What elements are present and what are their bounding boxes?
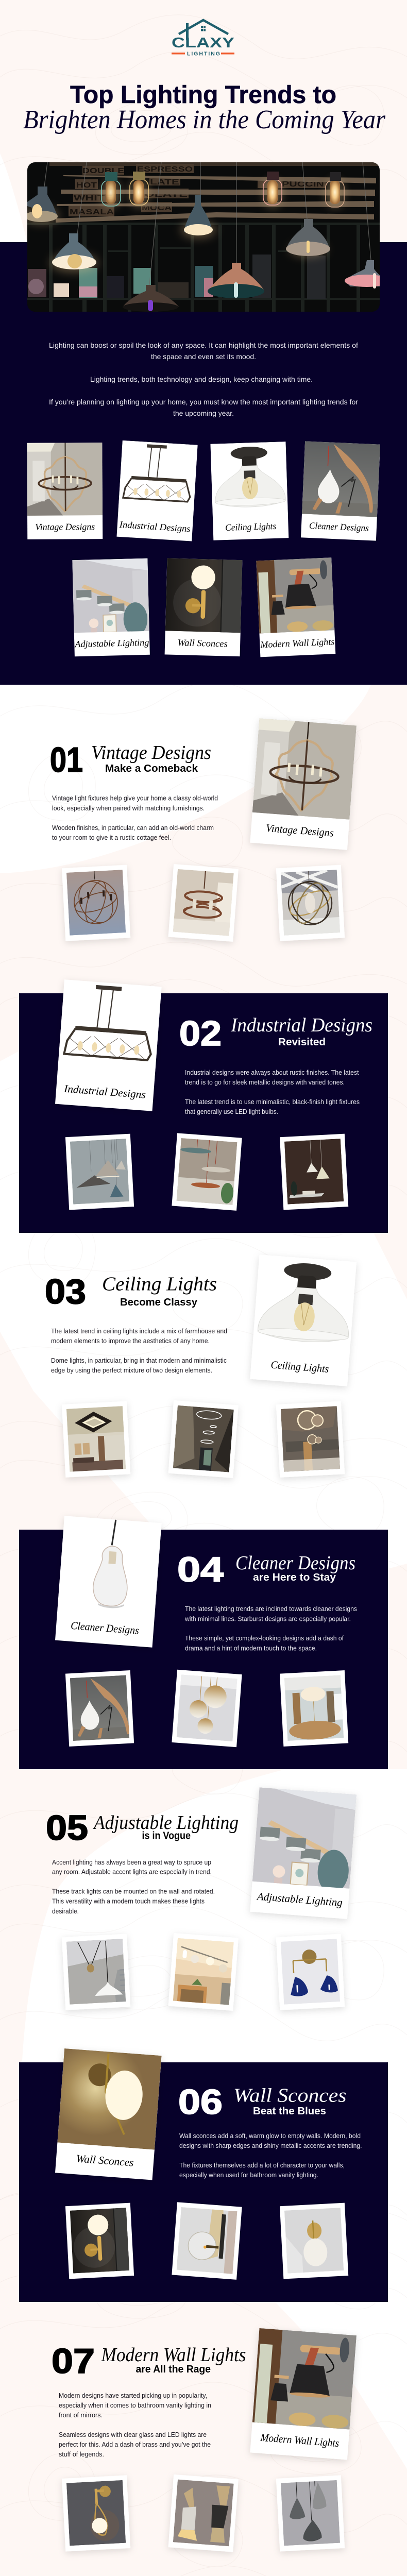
section 06 heading <box>178 2082 346 2122</box>
section 01 heading <box>50 740 211 779</box>
lamp: top left shade <box>25 187 58 222</box>
section 05 heading: 05 <box>46 1808 88 1848</box>
section 03 heading <box>45 1272 217 1311</box>
section 06 photos <box>65 2202 348 2280</box>
section 02 heading <box>179 1014 372 1053</box>
section 02 heading: Industrial Designs <box>230 1014 372 1036</box>
panel: section 06 <box>19 2062 388 2302</box>
section 05 text: This versatility with a modern touch makes these lights <box>52 1898 205 1905</box>
title <box>23 81 386 134</box>
section 04 text: These simple, yet complex-looking designs add a dash of <box>185 1635 344 1642</box>
section 01 text: look, especially when paired with matching furnishings. <box>52 805 205 812</box>
crate lettering: PUCCIN <box>282 180 324 189</box>
section 03 text: Dome lights, in particular, bring in that modern and minimalistic <box>51 1357 227 1364</box>
section 07 text <box>59 2392 211 2458</box>
section 02 feature card <box>55 979 162 1111</box>
section 04 heading: 04 <box>177 1550 224 1589</box>
section 06 feature card <box>55 2048 162 2180</box>
crate lettering: ESPRESSO <box>137 165 193 174</box>
card: Industrial Designs <box>116 440 198 541</box>
section 02 heading: 02 <box>179 1014 222 1053</box>
section 02 text: The latest trend is to use minimalistic, black-finish light fixtures <box>185 1098 360 1106</box>
crate lettering: WHITE <box>74 194 113 202</box>
section 06 text: Wall sconces add a soft, warm glow to empty walls. Modern, bold <box>179 2132 361 2140</box>
section 05 text: desirable. <box>52 1908 79 1915</box>
logo: Claxy Lighting: LIGHTING <box>187 50 220 57</box>
panel: intro navy band <box>0 242 407 685</box>
section 01 feature card: Vintage Designs <box>265 822 334 839</box>
section 04 feature card <box>55 1516 162 1648</box>
logo: Claxy Lighting <box>172 20 234 57</box>
section 05 text <box>52 1859 215 1915</box>
crate lettering <box>70 165 324 216</box>
lamp: left big shade <box>52 233 96 269</box>
section 04 feature card: Cleaner Designs <box>70 1619 140 1637</box>
section 05 heading: Adjustable Lighting <box>92 1812 239 1834</box>
crate lettering: HOT <box>76 181 97 190</box>
card: Modern Wall Lights: Modern Wall Lights <box>260 636 335 650</box>
crate lettering: DOUBLE <box>82 166 124 175</box>
section 06 text: The fixtures themselves add a lot of character to your walls, <box>179 2162 345 2169</box>
crate lettering: OLATE <box>144 190 188 199</box>
card: Adjustable Lighting: Adjustable Lighting <box>74 637 149 649</box>
section 02 text: trend is to go for sleek metallic designs with varied tones. <box>185 1079 345 1086</box>
crate lettering: MOCA <box>142 204 172 212</box>
section 07 text: Seamless designs with clear glass and LED lights are <box>59 2431 207 2438</box>
lamp: bottom dark cone <box>123 285 179 312</box>
section 05 text: Accent lighting has always been a great way to spruce up <box>52 1859 211 1866</box>
section 04 text: drama and a hint of modern touch to the space. <box>185 1645 317 1652</box>
hero photo: hanging lamps <box>24 162 389 312</box>
section 01 heading: Vintage Designs <box>91 742 211 764</box>
card: Ceiling Lights <box>210 442 289 540</box>
lamp: copper cone <box>208 263 264 298</box>
card: Wall Sconces: Wall Sconces <box>177 637 228 649</box>
section 02 text: Industrial designs were always about rustic finishes. The latest <box>185 1069 359 1076</box>
section 07 text: front of mirrors. <box>59 2412 103 2419</box>
section 01 text: Wooden finishes, in particular, can add an old-world charm <box>52 824 214 832</box>
section 07 text: especially when it comes to bathroom vanity lighting in <box>59 2402 211 2409</box>
crate lettering: MASALA <box>70 208 114 216</box>
section 06 heading: 06 <box>178 2082 223 2122</box>
section 03 heading: Become Classy <box>120 1297 198 1308</box>
section 03 photos <box>62 1400 345 1478</box>
section 07 heading: 07 <box>52 2342 95 2381</box>
section 05 feature card <box>250 1787 357 1919</box>
section 07 feature card <box>250 2328 357 2460</box>
title: Brighten Homes in the Coming Year <box>23 105 386 134</box>
section 04 heading <box>177 1550 355 1589</box>
lamp: centre bell <box>184 195 213 235</box>
section 02 text: that generally use LED light bulbs. <box>185 1108 278 1115</box>
lamp: pink right <box>345 260 380 289</box>
section 06 feature card: Wall Sconces <box>76 2152 134 2169</box>
section 04 photos <box>65 1670 348 1747</box>
card: Industrial Designs: Industrial Designs <box>118 519 191 534</box>
section 05 heading: is in Vogue <box>142 1830 191 1841</box>
intro text: Lighting can boost or spoil the look of any space. It can highlight the most important elements of <box>49 341 358 349</box>
section 04 text: with minimal lines. Starburst designs are especially popular. <box>184 1616 351 1623</box>
section 03 feature card <box>250 1255 357 1386</box>
section 03 heading: 03 <box>45 1272 86 1311</box>
section 01 text: Vintage light fixtures help give your home a classy old-world <box>52 794 218 802</box>
section 06 heading: Beat the Blues <box>253 2106 326 2117</box>
section 05 text: These track lights can be mounted on the wall and rotated. <box>52 1888 215 1895</box>
card: Cleaner Designs: Cleaner Designs <box>309 520 369 533</box>
card: Ceiling Lights: Ceiling Lights <box>225 521 276 533</box>
section 05 text: any room. Adjustable accent lights are especially in trend. <box>52 1868 212 1875</box>
section 07 text: Modern designs have started picking up in popularity, <box>59 2392 207 2399</box>
card: Vintage Designs: Vintage Designs <box>35 521 95 532</box>
section 02 photos <box>65 1133 348 1211</box>
section 05 heading <box>46 1808 239 1848</box>
section 01 feature card <box>250 718 357 850</box>
section 04 heading: Cleaner Designs <box>235 1552 355 1574</box>
section 03 heading: Ceiling Lights <box>102 1274 217 1295</box>
section 06 text <box>179 2132 362 2179</box>
section 02 feature card: Industrial Designs <box>63 1082 146 1101</box>
section 02 heading: Revisited <box>278 1037 326 1048</box>
section 07 text: stuff of legends. <box>59 2451 104 2458</box>
section 03 text: modern elements to improve the aesthetics of any home. <box>51 1337 210 1345</box>
section 06 text: designs with sharp edges and shiny metallic accents are trending. <box>179 2142 362 2149</box>
intro text <box>49 341 358 417</box>
section 01 text <box>52 794 218 841</box>
section 07 heading <box>52 2342 246 2381</box>
section 07 feature card: Modern Wall Lights <box>260 2431 340 2449</box>
panel: section 02 <box>19 993 388 1233</box>
logo: Claxy Lighting: CLAXY <box>172 35 234 50</box>
lamp: cage lights <box>106 180 340 204</box>
card: Vintage Designs <box>27 443 103 539</box>
card: Adjustable Lighting <box>72 558 150 656</box>
section 07 photos <box>62 2475 345 2552</box>
section 03 feature card: Ceiling Lights <box>270 1359 329 1375</box>
section 01 heading: Make a Comeback <box>105 763 198 774</box>
section 04 text: The latest lighting trends are inclined towards cleaner designs <box>185 1605 357 1613</box>
section 03 text <box>51 1328 227 1374</box>
section 03 text: The latest trend in ceiling lights include a mix of farmhouse and <box>51 1328 227 1335</box>
section 04 heading: are Here to Stay <box>253 1572 336 1583</box>
section 02 text <box>185 1069 360 1115</box>
section 07 heading: Modern Wall Lights <box>101 2344 246 2366</box>
intro text: If you’re planning on lighting up your home, you must know the most important lighting trends for <box>49 398 358 406</box>
section 05 photos <box>62 1933 345 2011</box>
intro text: the upcoming year. <box>173 409 234 417</box>
section 06 text: especially when used for bathroom vanity lighting. <box>179 2172 318 2179</box>
section 07 heading: are All the Rage <box>136 2364 211 2375</box>
card: Cleaner Designs <box>301 441 380 541</box>
card: Wall Sconces <box>165 558 242 656</box>
intro text: Lighting trends, both technology and design, keep changing with time. <box>90 375 313 383</box>
section 01 heading: 01 <box>50 740 83 779</box>
lamp: right big shade <box>286 219 330 256</box>
title: Top Lighting Trends to <box>70 81 336 109</box>
section 04 text <box>184 1605 357 1652</box>
section 06 heading: Wall Sconces <box>233 2084 346 2106</box>
card: Modern Wall Lights <box>256 557 335 657</box>
panel: section 04 <box>19 1530 388 1769</box>
section 05 feature card: Adjustable Lighting <box>256 1890 343 1909</box>
section 01 photos <box>62 864 345 942</box>
section 01 text: to your room to give it a rustic cottage feel. <box>52 834 171 841</box>
section 03 text: edge by using the perfect mixture of two design elements. <box>51 1367 212 1374</box>
intro text: the space and even set its mood. <box>151 352 256 361</box>
section 07 text: perfect for this. Add a dash of brass and you’ve got the <box>59 2441 211 2448</box>
crate lettering: LATE <box>150 178 179 187</box>
